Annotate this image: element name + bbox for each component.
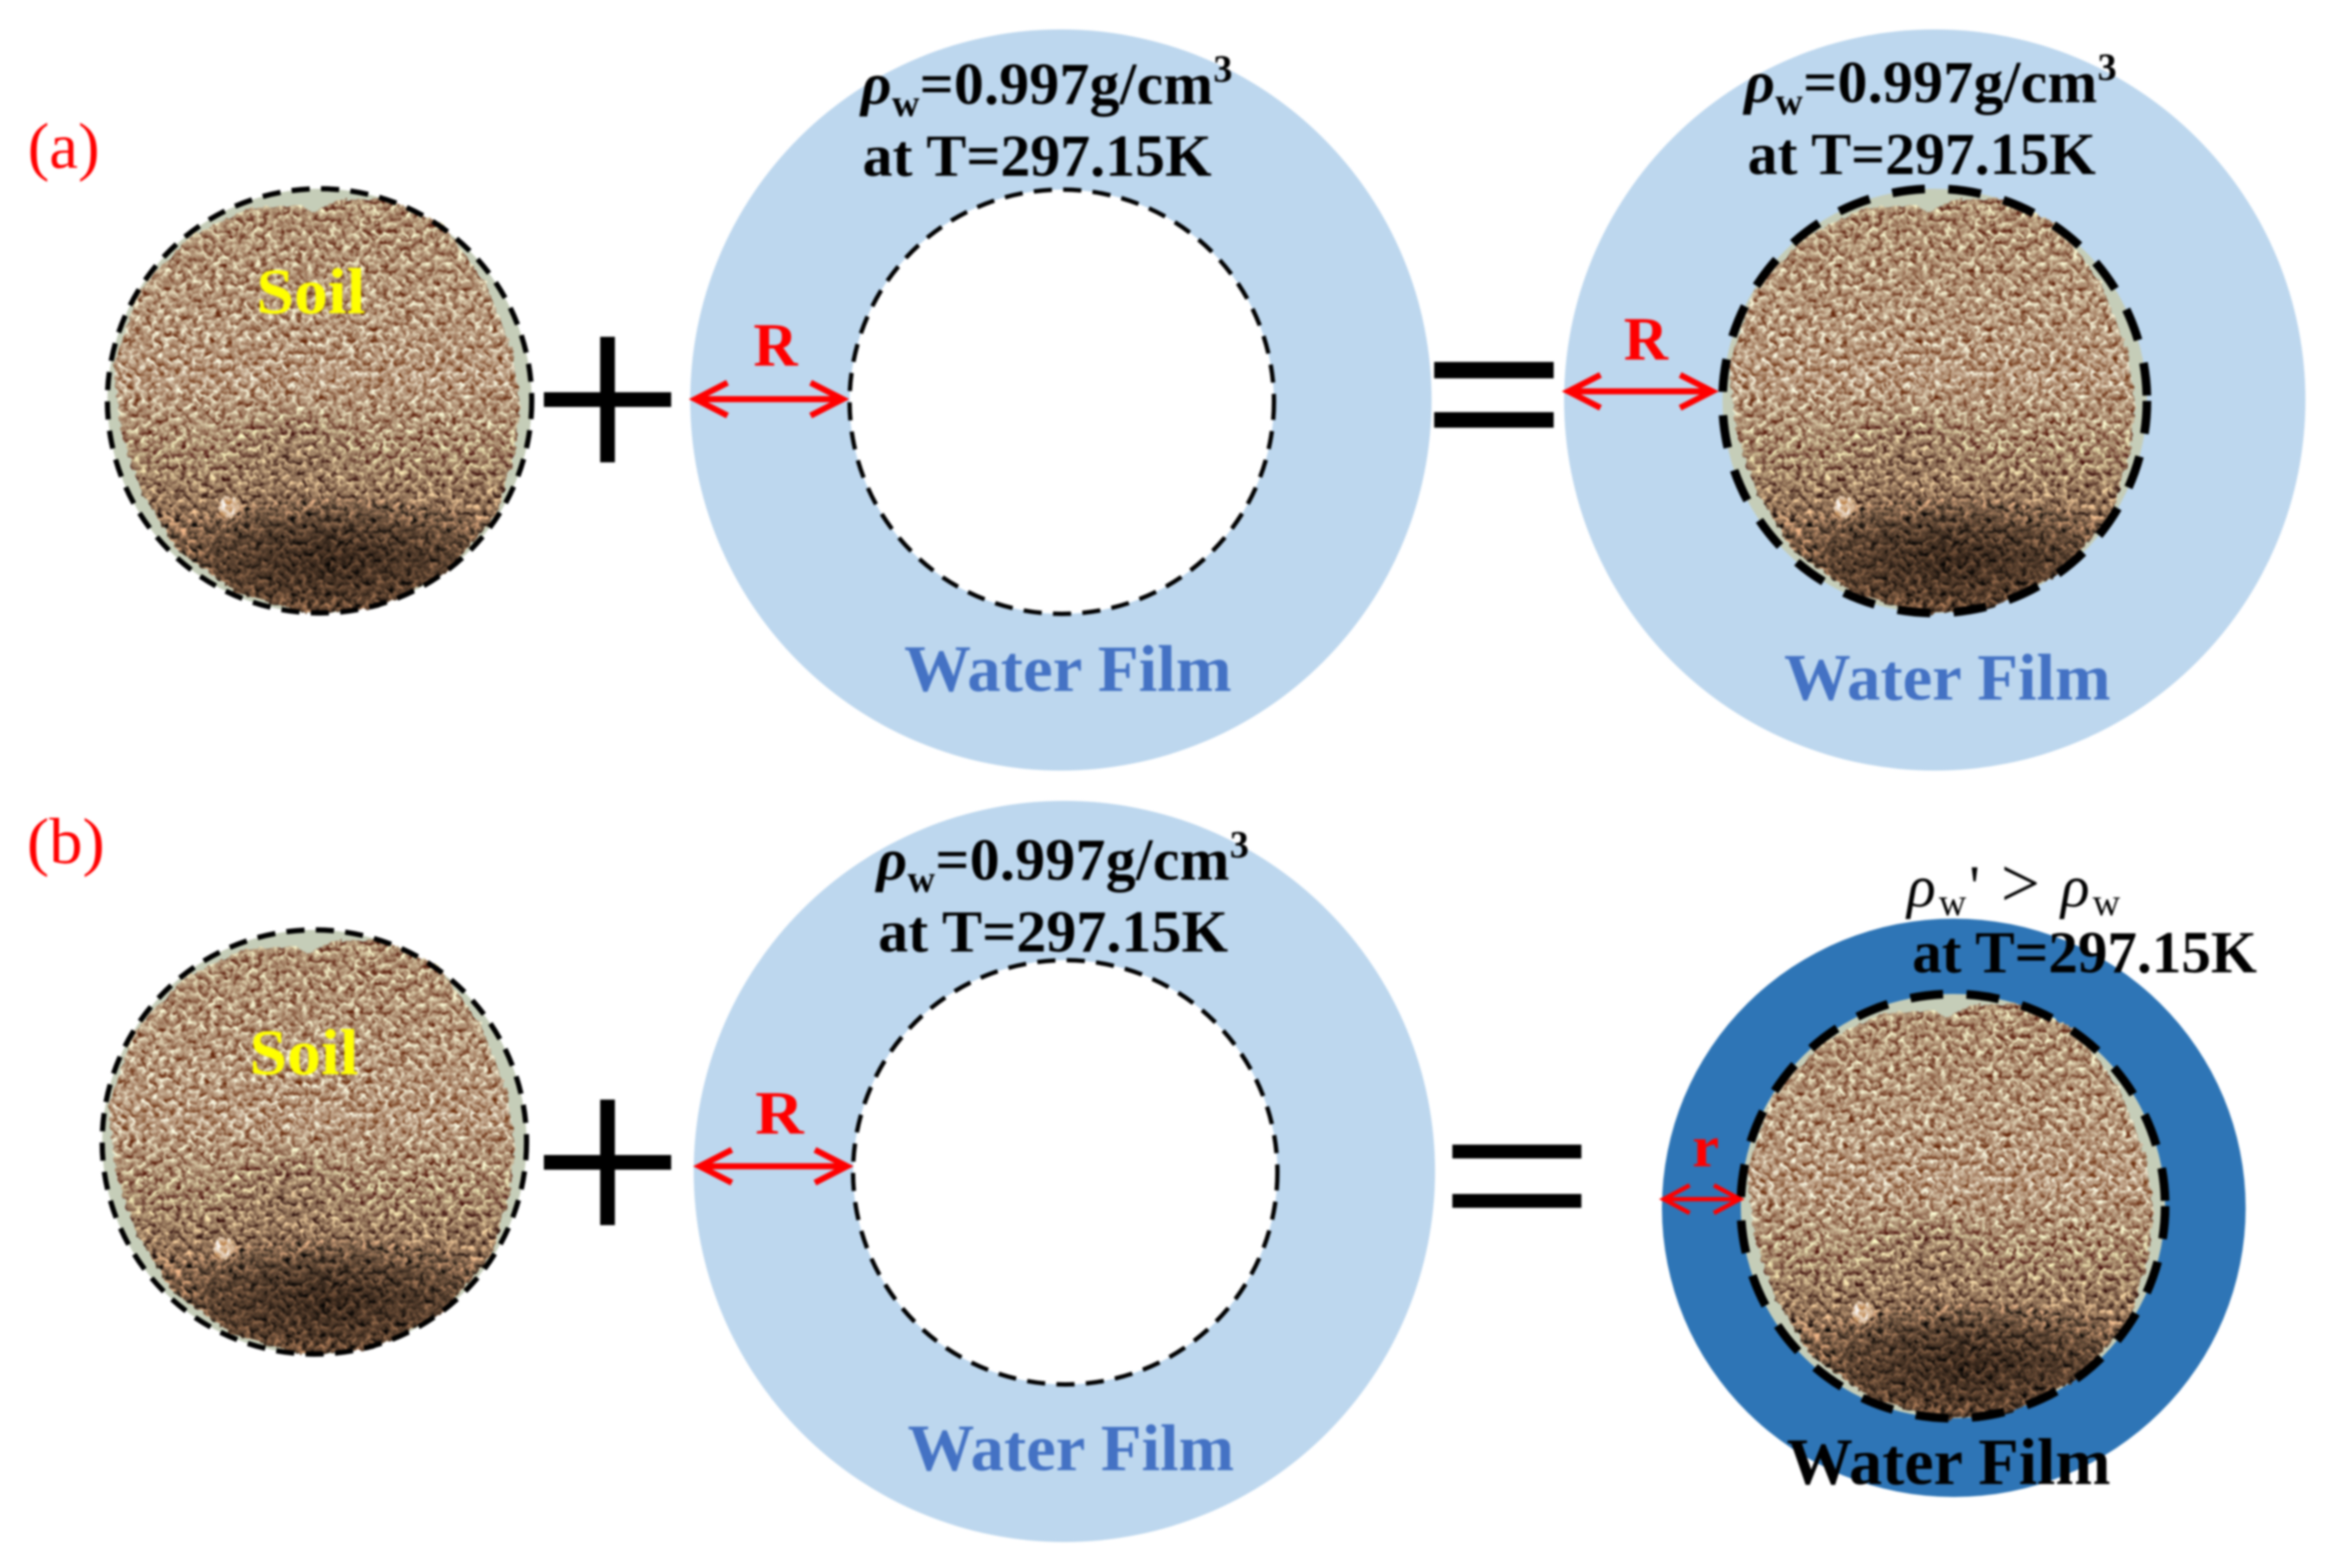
density label a: 3: [1213, 48, 1232, 90]
equals sign b: [1452, 1145, 1581, 1208]
arrow R b: [700, 1150, 847, 1183]
temperature label a: at T=297.15K: [863, 123, 1212, 189]
compressed water film ring b: [1662, 846, 2257, 1499]
soil sphere b: Soil: [249, 1017, 359, 1089]
panel: row b: [27, 801, 2257, 1542]
density comparison label: w: [2092, 881, 2120, 924]
plus sign b: [544, 1100, 671, 1225]
water film ring a: [690, 29, 1432, 771]
R dimension a: R: [753, 312, 798, 379]
density label a: ρ: [859, 51, 892, 117]
r dimension: r: [1692, 1113, 1719, 1179]
density comparison label: > ρ: [2001, 846, 2090, 922]
water film caption b right: Water Film: [1787, 1426, 2111, 1499]
density label a right: 3: [2098, 46, 2117, 88]
temperature label b right: at T=297.15K: [1912, 920, 2257, 985]
water film caption a: Water Film: [904, 633, 1232, 706]
R dimension a right: R: [1624, 306, 1669, 373]
density label a right: w: [1775, 81, 1803, 123]
temperature label a right: at T=297.15K: [1748, 121, 2096, 187]
arrow R a: [695, 383, 843, 416]
composite ring a: [1564, 29, 2305, 771]
R dimension b: R: [755, 1080, 805, 1147]
panel: row a: [28, 29, 2305, 771]
temperature label b: at T=297.15K: [878, 899, 1228, 965]
density label b: w: [908, 858, 935, 900]
soil sphere a: [103, 184, 536, 619]
density label b: ρ: [875, 827, 908, 893]
density label a right: =0.997g/cm: [1803, 49, 2098, 115]
arrow R a right: [1568, 375, 1712, 408]
label: (a): (a): [28, 111, 100, 183]
water film caption b: Water Film: [908, 1412, 1234, 1485]
density comparison label: ρ: [1905, 854, 1936, 920]
density comparison label: w: [1939, 881, 1967, 924]
soil sphere a: Soil: [256, 256, 365, 328]
density label a: =0.997g/cm: [920, 51, 1213, 117]
water film ring b: [694, 801, 1435, 1542]
water film caption a right: Water Film: [1784, 642, 2111, 714]
arrow r: [1664, 1185, 1740, 1213]
label: (b): (b): [27, 806, 105, 878]
density label b: 3: [1230, 823, 1249, 866]
equals sign a: [1434, 362, 1554, 428]
density label b: =0.997g/cm: [935, 827, 1230, 893]
plus sign a: [544, 337, 671, 462]
density comparison label: ': [1969, 854, 1998, 920]
soil sphere b: [98, 926, 531, 1360]
density label a: w: [892, 82, 920, 125]
density label a right: ρ: [1742, 49, 1775, 115]
